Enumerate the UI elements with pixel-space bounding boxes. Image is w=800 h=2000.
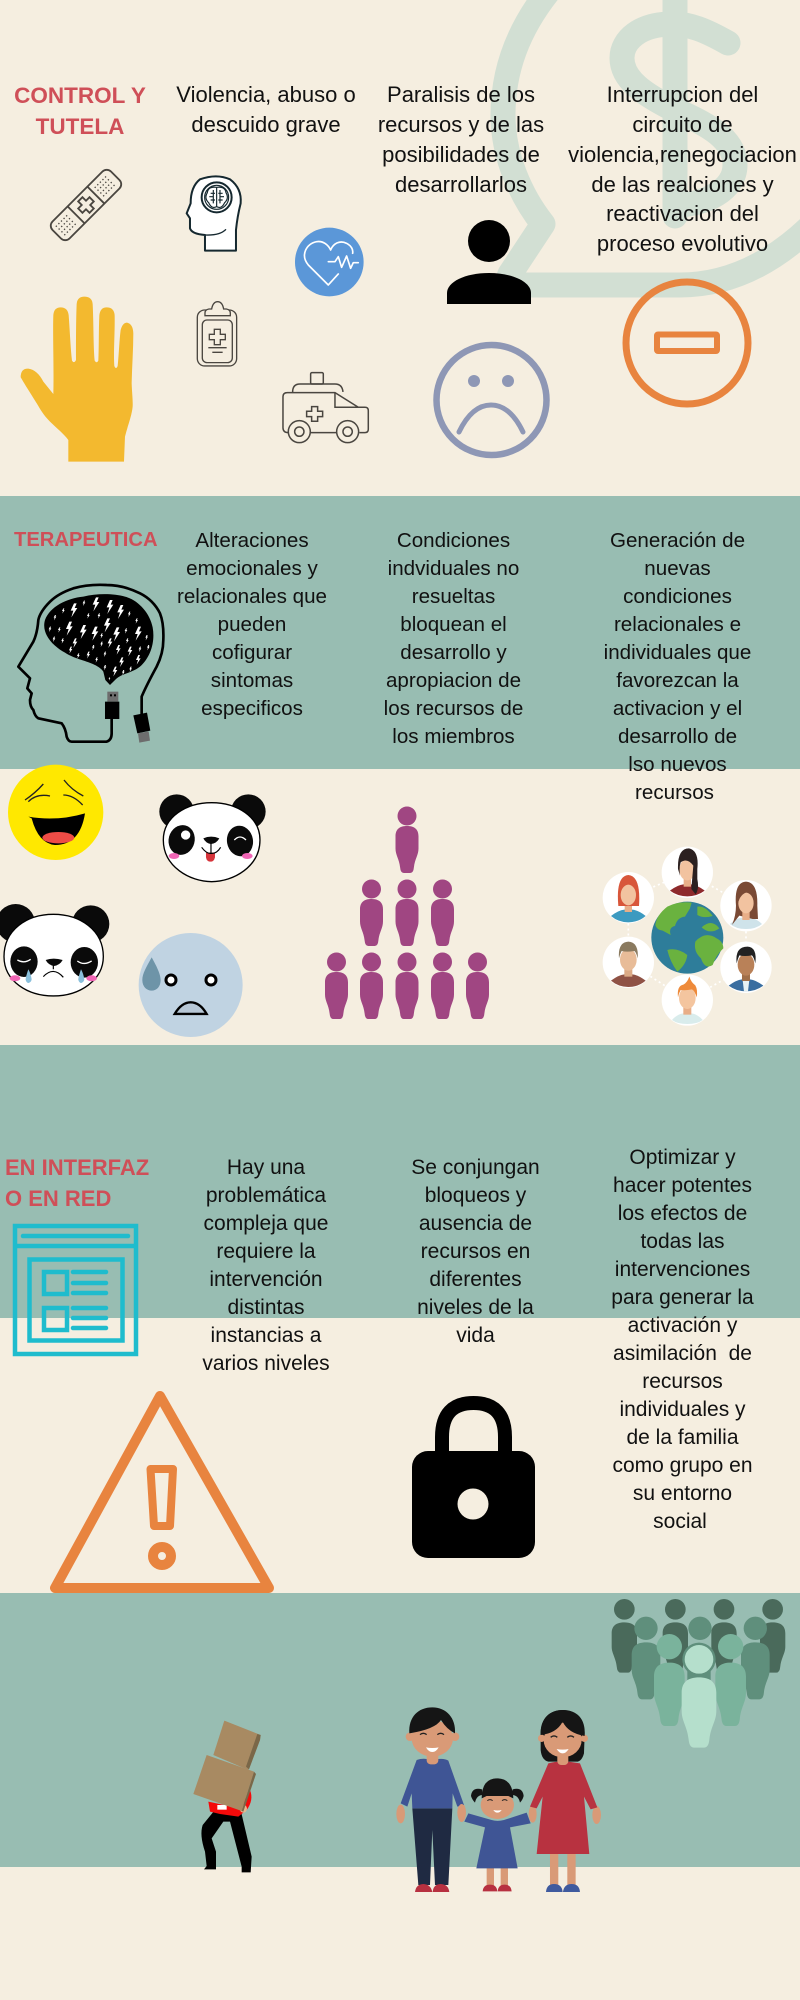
text: optimizar: todas las (640, 1230, 725, 1253)
icon: person (447, 220, 531, 304)
text: optimizar: como grupo en (612, 1454, 753, 1477)
figure: mother (530, 1710, 601, 1892)
text: alteraciones: cofigurar (212, 641, 292, 664)
heading: control y tutela: CONTROL Y (14, 83, 146, 108)
illustration: family (396, 1707, 601, 1892)
icon: head with usb cable (18, 585, 163, 743)
heading: en interfaz o en red (5, 1155, 149, 1211)
text: interrupcion: circuito de (632, 112, 733, 137)
text: optimizar: activación y (628, 1314, 738, 1337)
text: problematica: instancias a (211, 1324, 322, 1347)
text: bloqueos: vida (456, 1324, 495, 1347)
text: condiciones: apropiacion de (386, 669, 521, 692)
text: problematica: Hay una (227, 1156, 305, 1179)
text: alteraciones: emocionales y (186, 557, 319, 580)
text: bloqueos: bloqueos y (425, 1184, 527, 1207)
heading: control y tutela (14, 83, 146, 139)
figure: daughter (458, 1778, 537, 1891)
text: paralisis: Paralisis de los (387, 82, 535, 107)
heading: control y tutela: TUTELA (36, 114, 124, 139)
text: paralisis: posibilidades de (382, 142, 540, 167)
text: bloqueos: ausencia de (419, 1212, 532, 1235)
icon: document (15, 1226, 136, 1354)
text: generacion: recursos (635, 781, 714, 804)
text: optimizar: intervenciones (615, 1258, 750, 1281)
person: dark haired woman (670, 848, 705, 896)
text: bloqueos (411, 1156, 540, 1347)
text: bloqueos: recursos en (421, 1240, 530, 1263)
text: problematica: compleja que (204, 1212, 328, 1235)
person: brown haired woman (730, 882, 762, 929)
text: bloqueos: diferentes (429, 1268, 522, 1291)
text: alteraciones: pueden (218, 613, 286, 636)
text: optimizar (611, 1146, 754, 1533)
person: red haired woman (611, 875, 646, 922)
watermark: dollar sign (503, 0, 800, 285)
text: generacion: nuevas (644, 557, 711, 580)
text: problematica (202, 1156, 330, 1375)
text: problematica: intervención (209, 1268, 323, 1291)
text: generacion: Generación de (610, 529, 745, 552)
text: paralisis: recursos y de las (378, 112, 544, 137)
text: problematica: requiere la (216, 1240, 316, 1263)
text: condiciones: indviduales no (388, 557, 519, 580)
text: optimizar: social (653, 1510, 707, 1533)
text: condiciones: los recursos de (384, 697, 523, 720)
text: interrupcion: violencia,renegociacion (568, 142, 797, 167)
text: condiciones: bloquean el (400, 613, 507, 636)
text: alteraciones: especificos (201, 697, 303, 720)
person: dark skinned man (729, 947, 763, 991)
icon: ambulance (283, 373, 368, 443)
icon: clipboard (197, 302, 237, 366)
text: violencia: descuido grave (191, 112, 341, 137)
icon: globe with people network (603, 847, 772, 1026)
icon: yellow hand (21, 297, 133, 462)
text: generacion (604, 529, 751, 804)
text: generacion: relacionales e (614, 613, 741, 636)
icon: crying panda (0, 904, 109, 996)
heading: terapeutica: TERAPEUTICA (14, 529, 158, 551)
text: optimizar: su entorno (633, 1482, 732, 1505)
icon: minus circle (626, 282, 748, 404)
icon: blue heart pulse (295, 228, 364, 296)
icon: worried blue face (139, 933, 243, 1037)
text: paralisis (378, 82, 544, 197)
text: condiciones: los miembros (392, 725, 515, 748)
icon: bandage (48, 167, 124, 243)
text: optimizar: recursos (642, 1370, 723, 1393)
text: interrupcion: de las realciones y (591, 172, 774, 197)
icon: purple people pyramid (325, 806, 489, 1019)
person: man with short hair (611, 942, 646, 987)
text: interrupcion: proceso evolutivo (597, 231, 768, 256)
text: bloqueos: Se conjungan (411, 1156, 540, 1179)
text: violencia (176, 82, 356, 137)
text: interrupcion: reactivacion del (606, 201, 759, 226)
text: condiciones (384, 529, 523, 748)
text: optimizar: de la familia (626, 1426, 739, 1449)
text: problematica: problemática (206, 1184, 326, 1207)
text: generacion: favorezcan la (616, 669, 739, 692)
text: violencia: Violencia, abuso o (176, 82, 356, 107)
text: bloqueos: niveles de la (417, 1296, 534, 1319)
text: optimizar: asimilación de (613, 1342, 752, 1365)
icon: padlock (412, 1403, 535, 1558)
icon: warning triangle (55, 1396, 269, 1588)
text: alteraciones: relacionales que (177, 585, 327, 608)
icon: sad face (436, 345, 546, 455)
text: generacion: desarrollo de (618, 725, 737, 748)
text: problematica: varios niveles (202, 1352, 330, 1375)
icon: head with brain (187, 176, 241, 251)
text: condiciones: resueltas (412, 585, 495, 608)
text: condiciones: desarrollo y (400, 641, 507, 664)
text: alteraciones: sintomas (211, 669, 293, 692)
text: optimizar: individuales y (619, 1398, 746, 1421)
text: generacion: lso nuevos (628, 753, 727, 776)
text: interrupcion: Interrupcion del (607, 82, 758, 107)
heading: en interfaz o en red: EN INTERFAZ (5, 1155, 149, 1180)
text: generacion: condiciones (623, 585, 732, 608)
text: optimizar: para generar la (611, 1286, 754, 1309)
text: paralisis: desarrollarlos (395, 172, 527, 197)
figure: father (396, 1707, 466, 1892)
icon: happy panda (159, 794, 266, 882)
text: generacion: individuales que (604, 641, 751, 664)
heading: en interfaz o en red: O EN RED (5, 1186, 111, 1211)
person: orange haired man (672, 977, 703, 1024)
icon: man carrying boxes (193, 1721, 261, 1872)
icon: laughing emoji (8, 765, 103, 860)
text: condiciones: Condiciones (397, 529, 510, 552)
text: generacion: activacion y el (613, 697, 742, 720)
text: optimizar: Optimizar y (629, 1146, 736, 1169)
text: alteraciones (177, 529, 327, 720)
text: interrupcion (568, 82, 797, 256)
text: alteraciones: Alteraciones (195, 529, 309, 552)
text: optimizar: hacer potentes (613, 1174, 752, 1197)
text: optimizar: los efectos de (618, 1202, 747, 1225)
icon: crowd (612, 1599, 785, 1748)
text: problematica: distintas (227, 1296, 305, 1319)
